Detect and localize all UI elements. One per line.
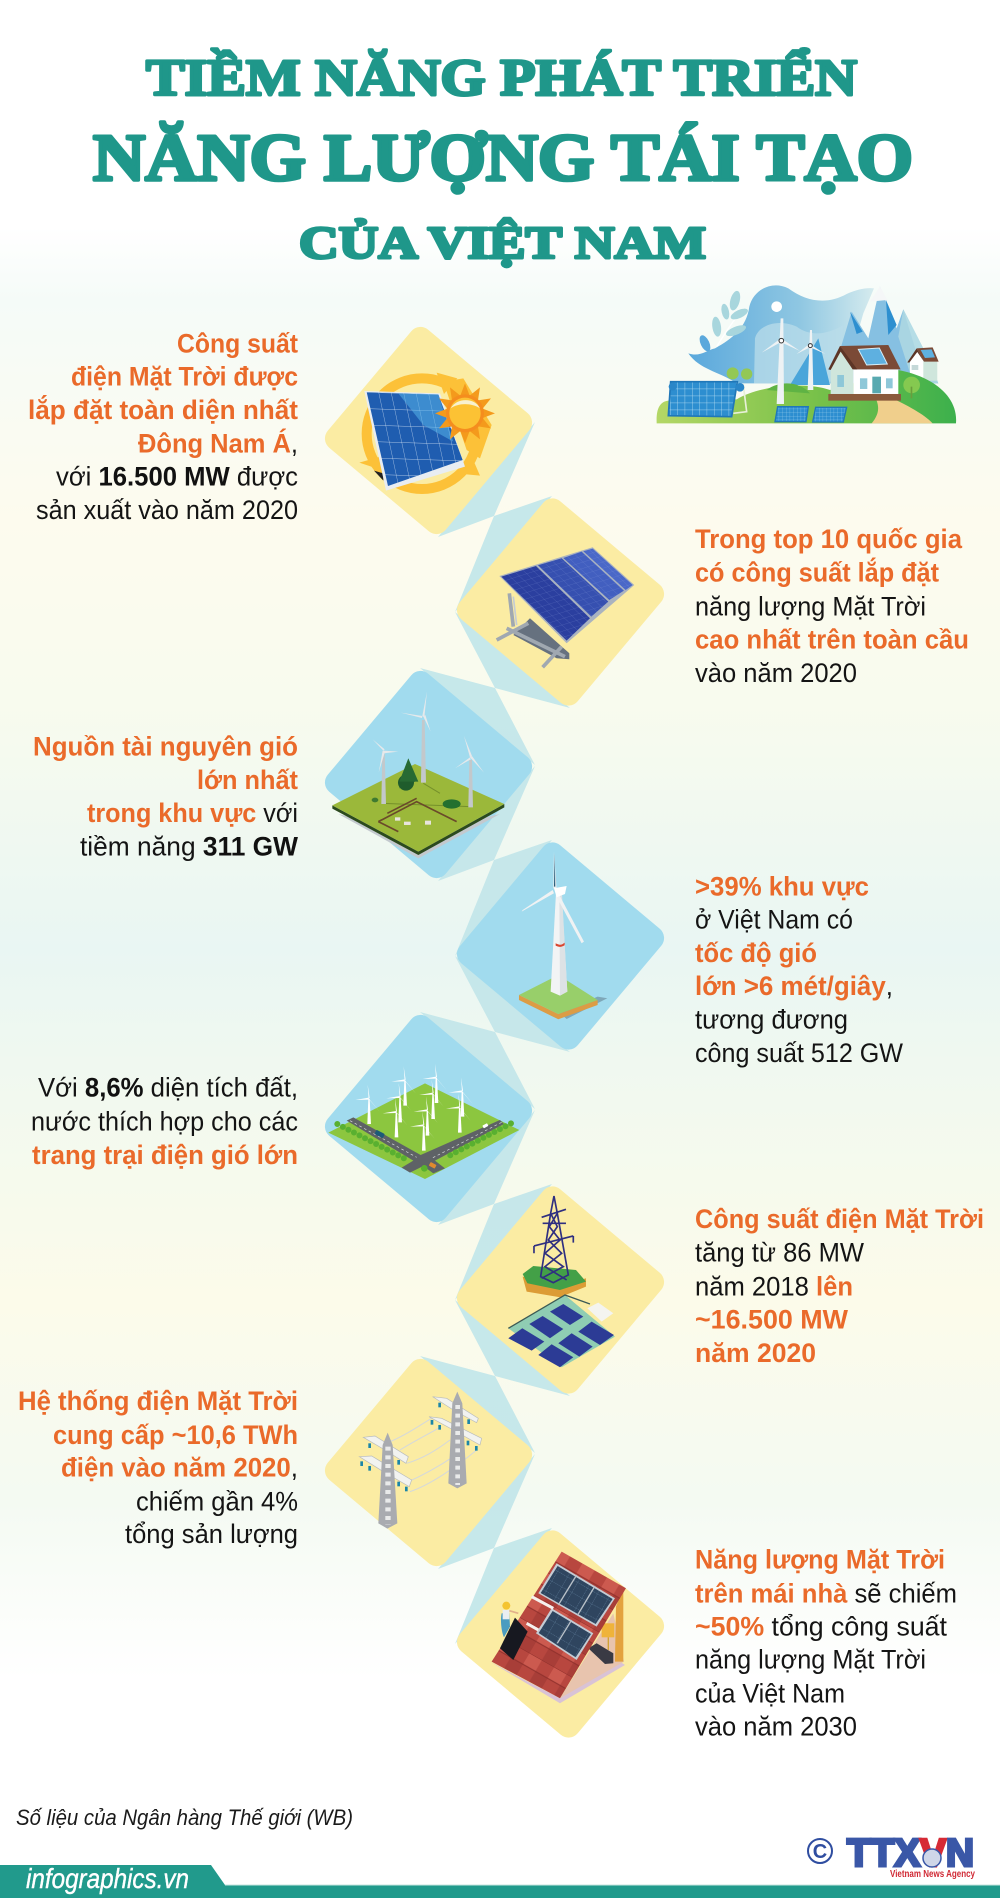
icon: wind farm on grass block: [332, 692, 504, 858]
icon: transmission pylons: [359, 1392, 482, 1529]
text block: Công suất: [177, 329, 298, 359]
text block: tăng từ 86 MW: [695, 1237, 864, 1267]
text block: cao nhất trên toàn cầu: [695, 625, 969, 655]
text block: ~50% tổng công suất: [695, 1612, 948, 1642]
text block: năng lượng Mặt Trời: [695, 591, 926, 621]
text block: năm 2020: [695, 1338, 816, 1368]
panel 5: land for wind farms: [31, 1010, 537, 1227]
text block: Trong top 10 quốc gia: [695, 524, 962, 554]
text block: [695, 1204, 984, 1368]
icon: tilted solar array: [497, 547, 634, 667]
text block: lớn nhất: [197, 765, 298, 795]
text block: của Việt Nam: [695, 1678, 845, 1708]
text block: nước thích hợp cho các: [31, 1107, 298, 1137]
large panel: [733, 385, 747, 413]
text block: lắp đặt toàn diện nhất: [28, 395, 298, 425]
text block: [33, 732, 298, 862]
text block: Năng lượng Mặt Trời: [695, 1545, 945, 1575]
panel 1: solar capacity: [28, 322, 537, 539]
text block: [31, 1073, 298, 1170]
footer band: [0, 1863, 1000, 1898]
text block: lớn >6 mét/giây,: [695, 971, 893, 1001]
source note: Số liệu của Ngân hàng Thế giới (WB): [16, 1805, 353, 1830]
text block: tiềm năng 311 GW: [80, 832, 298, 862]
text block: [695, 1545, 957, 1742]
text block: Công suất điện Mặt Trời: [695, 1204, 984, 1234]
text block: sản xuất vào năm 2020: [36, 495, 298, 525]
text block: [18, 1386, 298, 1549]
small house: [907, 347, 939, 381]
text block: điện Mặt Trời được: [71, 361, 298, 391]
text block: công suất 512 GW: [695, 1038, 903, 1068]
text block: năm 2018 lên: [695, 1271, 853, 1301]
title: NĂNG LƯỢNG TÁI TẠO: [93, 121, 913, 195]
icon: solar panel with sun: [359, 373, 495, 491]
panel 2: top 10 solar: [452, 494, 969, 710]
text block: vào năm 2020: [695, 658, 857, 688]
text block: ~16.500 MW: [695, 1305, 848, 1335]
logo: TTXVN: TTXVN: [847, 1832, 974, 1875]
turbines: [762, 318, 825, 404]
footer band: infographics.vn: [26, 1863, 189, 1894]
panel 4: wind speed: [452, 838, 903, 1068]
text block: Hệ thống điện Mặt Trời: [18, 1386, 298, 1416]
text block: trong khu vực với: [87, 798, 298, 828]
title: TIỀM NĂNG PHÁT TRIỂN: [146, 47, 857, 107]
text block: tổng sản lượng: [125, 1519, 298, 1549]
panel 8: rooftop solar: [452, 1526, 957, 1742]
logo: TTXVN: Vietnam News Agency: [890, 1869, 975, 1880]
text block: trang trại điện gió lớn: [32, 1140, 298, 1170]
panel 3: wind resource: [33, 666, 537, 883]
text block: ở Việt Nam có: [695, 905, 853, 935]
text block: điện vào năm 2020,: [61, 1453, 298, 1483]
text block: có công suất lắp đặt: [695, 557, 939, 587]
icon: large wind farm with roads: [328, 1064, 519, 1179]
small panels: [775, 407, 808, 422]
text block: [695, 872, 903, 1068]
text block: [695, 524, 969, 688]
text block: tốc độ gió: [695, 938, 817, 968]
text block: vào năm 2030: [695, 1712, 857, 1742]
main house: [831, 348, 853, 394]
text block: tương đương: [695, 1005, 848, 1035]
text block: Đông Nam Á,: [138, 429, 298, 459]
text block: năng lượng Mặt Trời: [695, 1645, 926, 1675]
panel 7: solar generation: [18, 1354, 537, 1571]
text block: chiếm gần 4%: [136, 1487, 298, 1517]
title: [93, 47, 913, 268]
text block: Nguồn tài nguyên gió: [33, 732, 298, 762]
connectors: diagonal ribbons: [420, 422, 570, 1644]
title: CỦA VIỆT NAM: [299, 217, 706, 268]
logo: TTXVN: C: [813, 1841, 827, 1863]
text block: >39% khu vực: [695, 872, 869, 902]
text block: trên mái nhà sẽ chiếm: [695, 1578, 957, 1608]
icon: pylon and solar farm: [508, 1196, 615, 1367]
trees: [727, 367, 739, 379]
text block: [28, 329, 298, 525]
icon: rooftop solar installation: [490, 1552, 626, 1703]
hills: [657, 370, 956, 423]
icon: single wind turbine: [519, 852, 607, 1019]
text block: cung cấp ~10,6 TWh: [53, 1420, 298, 1450]
illustration: renewable energy landscape: [657, 285, 956, 423]
logo: TTXVN: [808, 1832, 975, 1880]
text block: với 16.500 MW được: [56, 461, 298, 491]
panel 6: solar growth: [452, 1182, 984, 1398]
text block: Với 8,6% diện tích đất,: [38, 1073, 298, 1103]
